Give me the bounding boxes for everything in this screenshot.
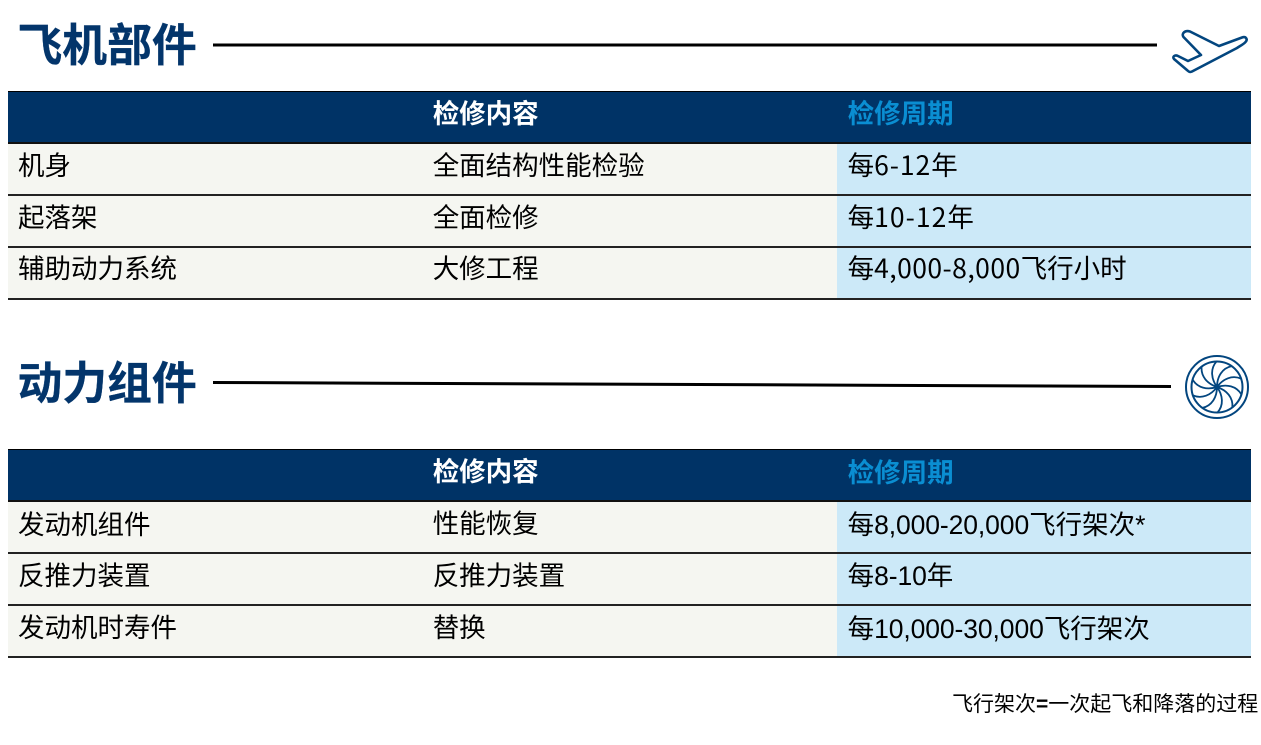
- table: aircraft parts: [8, 91, 1251, 300]
- footnote: 飞行架次=一次起飞和降落的过程: [952, 693, 1258, 716]
- row: thrust reverser: 反推力装置: [433, 561, 565, 591]
- header: inspection content: 检修内容: [433, 457, 539, 487]
- row: life-limited parts: 替换: [433, 613, 486, 643]
- header: inspection cycle: 检修周期: [848, 458, 954, 488]
- row: landing gear: [8, 196, 1251, 248]
- row: life-limited parts: 每10,000-30,000飞行架次: [848, 614, 1150, 644]
- header: inspection content: 检修内容: [433, 99, 539, 129]
- table: power components: [8, 449, 1251, 658]
- row: engine components: 每8,000-20,000飞行架次*: [848, 510, 1145, 540]
- row: thrust reverser: 每8-10年: [848, 561, 953, 591]
- row: APU: 大修工程: [433, 254, 539, 284]
- row: engine components: 发动机组件: [18, 510, 150, 540]
- row: thrust reverser: 反推力装置: [18, 561, 150, 591]
- row: APU: [8, 248, 1251, 300]
- icon: airplane: [1172, 30, 1248, 74]
- row: fuselage: 每6-12年: [848, 144, 958, 183]
- row: APU: 每4,000-8,000飞行小时: [848, 247, 1127, 286]
- row: engine components: [8, 502, 1251, 554]
- row: fuselage: [8, 144, 1251, 196]
- icon: turbine: [1185, 355, 1249, 419]
- header row: [8, 91, 1251, 144]
- row: fuselage: 全面结构性能检验: [433, 151, 645, 181]
- row: APU: 辅助动力系统: [18, 254, 177, 284]
- row: fuselage: 机身: [18, 151, 71, 181]
- row: life-limited parts: 发动机时寿件: [18, 613, 177, 643]
- row: landing gear: 全面检修: [433, 203, 539, 233]
- row: engine components: 性能恢复: [433, 509, 539, 539]
- title: aircraft parts: 飞机部件: [18, 21, 197, 71]
- divider line: aircraft parts: [213, 44, 1157, 46]
- header: inspection cycle: 检修周期: [848, 99, 954, 129]
- row: landing gear: 每10-12年: [848, 196, 974, 235]
- title: power components: 动力组件: [18, 359, 197, 409]
- header row: [8, 449, 1251, 502]
- row: landing gear: 起落架: [18, 203, 98, 233]
- row: life-limited parts: [8, 606, 1251, 658]
- divider line: power components: [213, 381, 1171, 388]
- row: thrust reverser: [8, 554, 1251, 606]
